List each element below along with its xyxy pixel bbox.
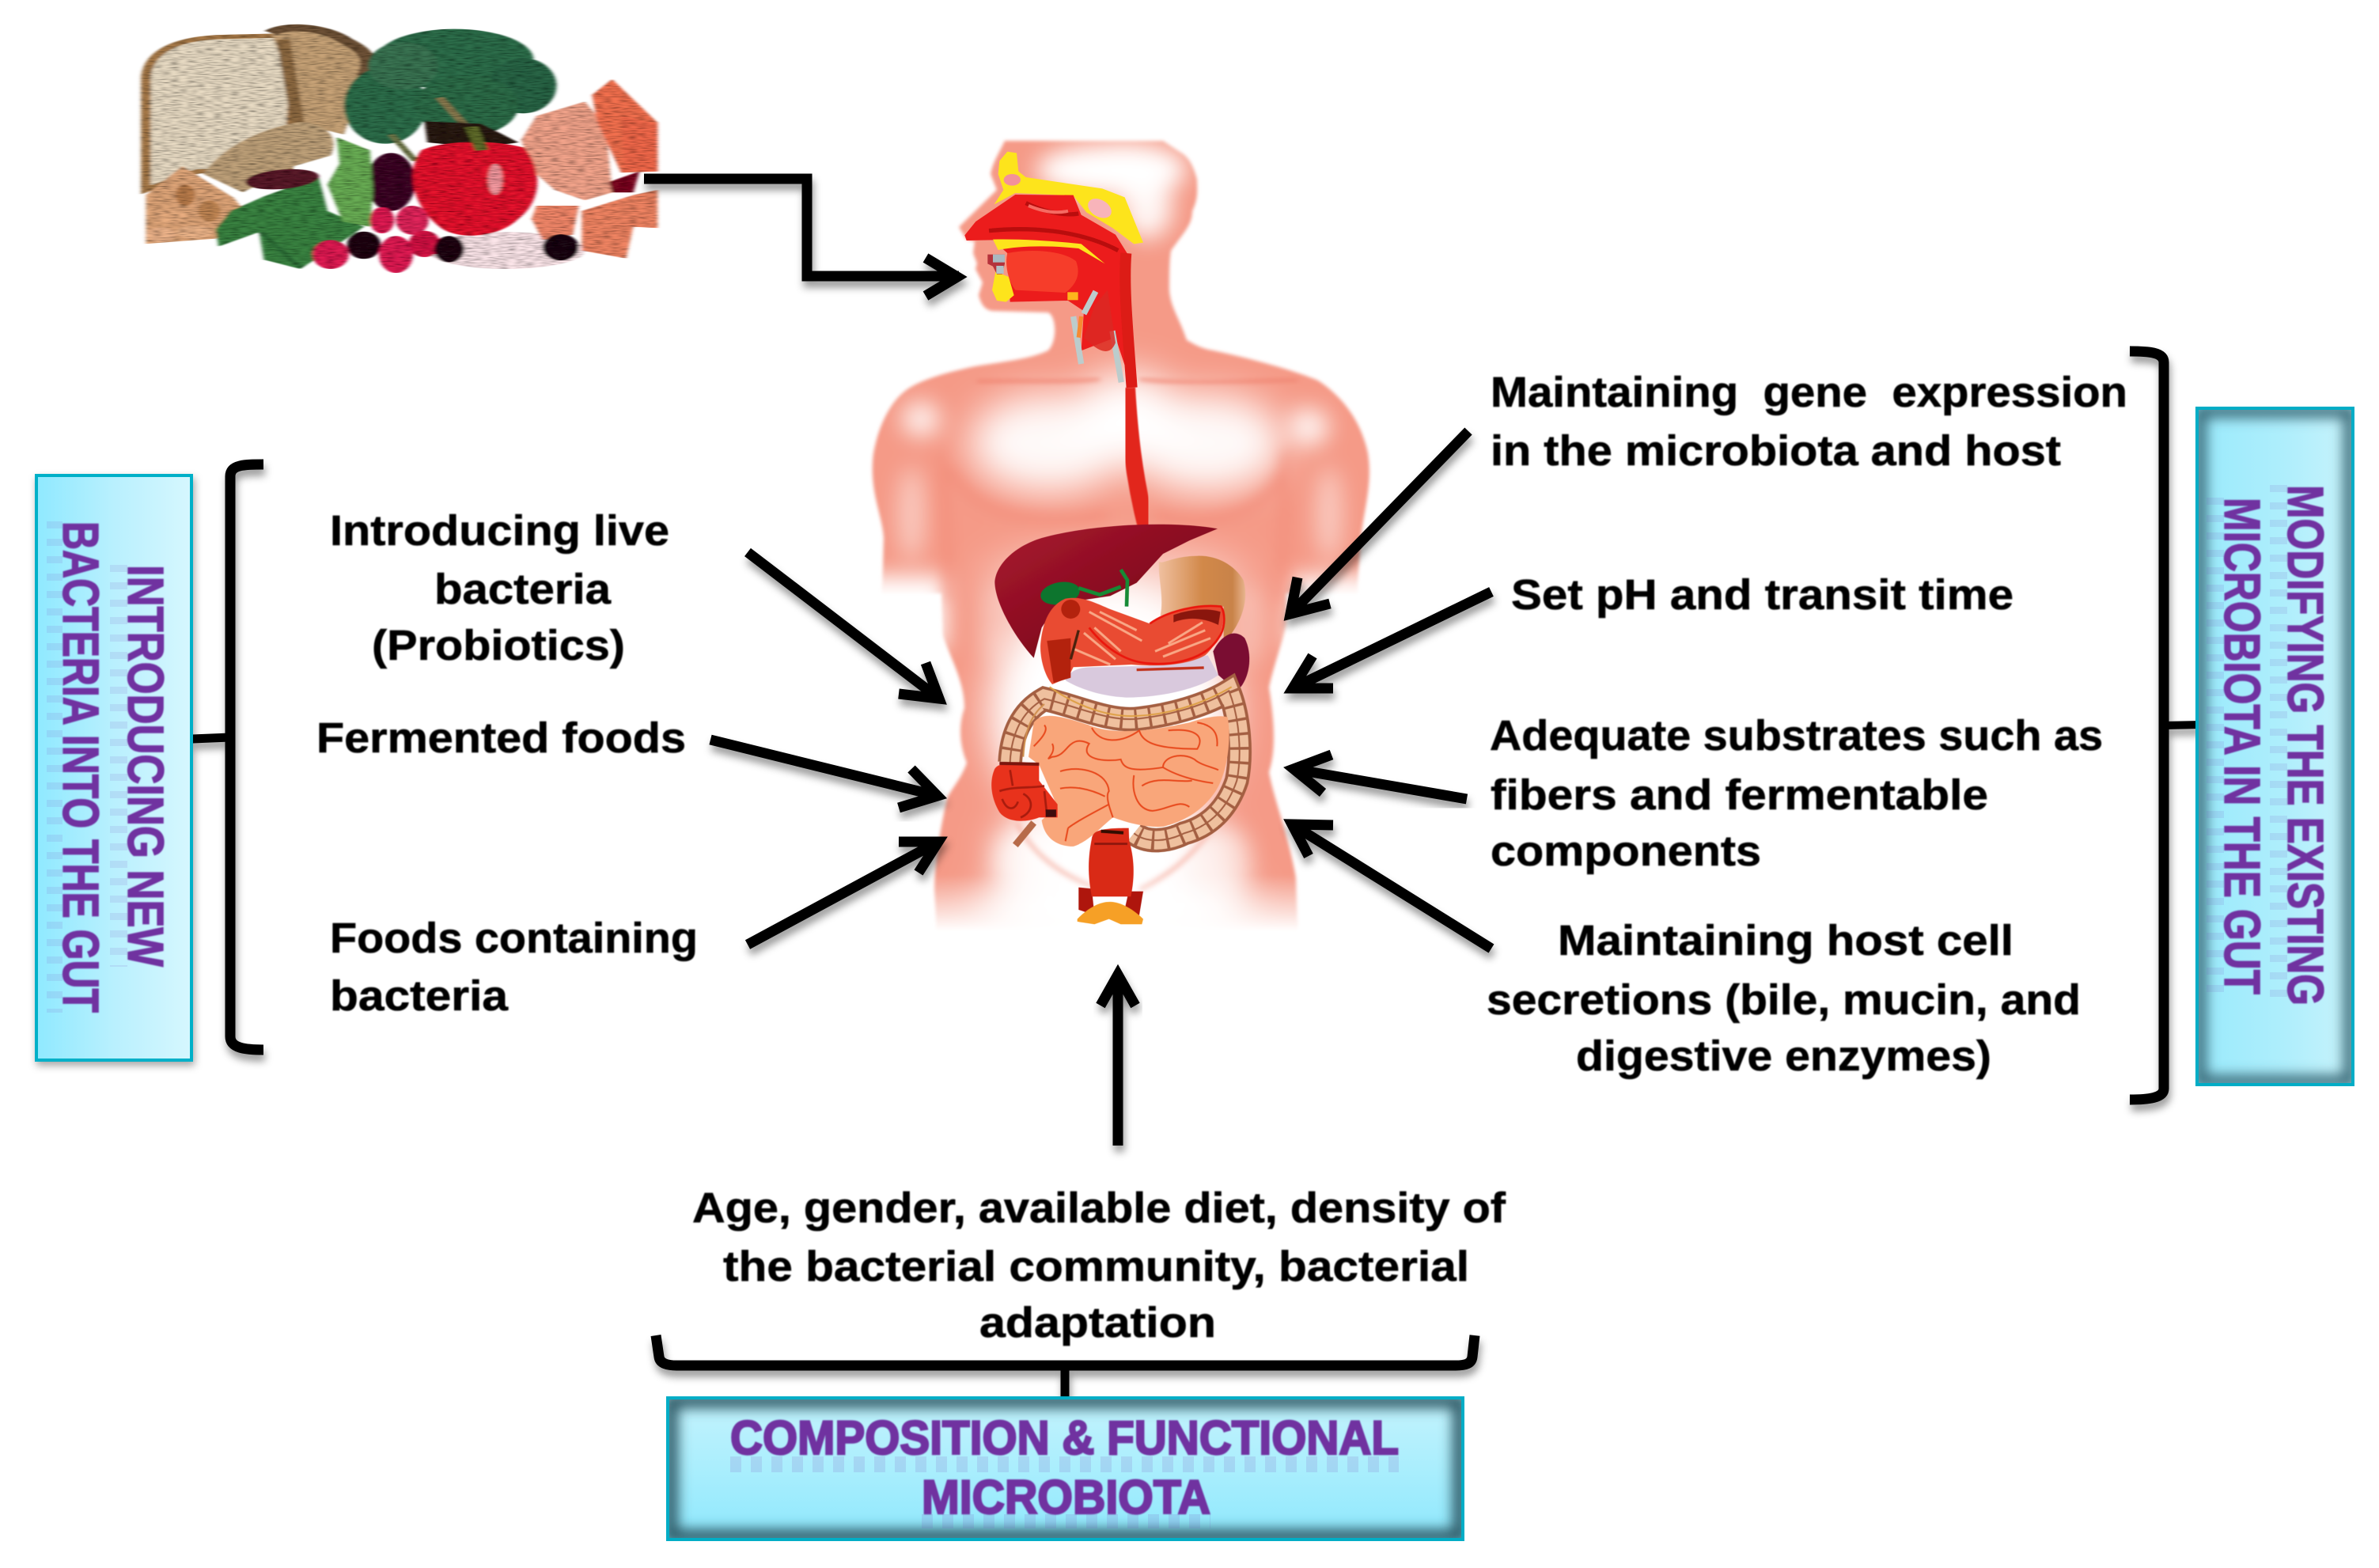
arrow: adequate substrates bbox=[1294, 755, 1467, 799]
text: host cell secretions: Maintaining host cell bbox=[1558, 917, 2013, 964]
text reflections bbox=[730, 1464, 1399, 1521]
rectum bbox=[1078, 828, 1143, 924]
pancreas bbox=[1066, 655, 1218, 698]
dark beet bbox=[241, 166, 324, 193]
bread slices bbox=[146, 28, 368, 190]
chest creases bbox=[941, 451, 1286, 601]
text: gene expression bbox=[1491, 369, 2127, 475]
colon bbox=[1010, 687, 1240, 840]
text: fermented foods: Fermented foods bbox=[316, 714, 686, 762]
arrow: host cell secretions bbox=[1292, 824, 1491, 949]
text reflections bbox=[2215, 485, 2279, 1006]
red pepper bbox=[413, 127, 537, 236]
grain loaf bbox=[203, 122, 334, 192]
duodenum and stomach cut bbox=[1040, 598, 1224, 684]
heading: bottom panel label bbox=[730, 1411, 1399, 1524]
text: foods containing bacteria: bacteria bbox=[330, 972, 509, 1020]
text: introducing live bacteria: bacteria bbox=[434, 566, 612, 613]
broccoli bbox=[344, 29, 556, 161]
arrow: pH and transit time bbox=[1293, 592, 1491, 688]
jaw bbox=[992, 271, 1014, 302]
abdominal organs bbox=[991, 525, 1249, 924]
text: age, gender, diet factors: adaptation bbox=[979, 1299, 1216, 1346]
small intestine bbox=[1029, 716, 1229, 846]
heading: bottom panel label: COMPOSITION & FUNCTIONAL bbox=[730, 1411, 1399, 1464]
tongue bbox=[1006, 251, 1078, 293]
text: adequate substrates: components bbox=[1491, 828, 1761, 875]
text: adequate substrates: Adequate substrates such as bbox=[1490, 712, 2103, 759]
salmon melon pieces bbox=[521, 79, 657, 259]
heading: bottom panel label: MICROBIOTA bbox=[922, 1471, 1210, 1524]
cecum and appendix bbox=[991, 762, 1058, 845]
text: age, gender, diet factors: the bacterial community, bacterial bbox=[723, 1243, 1469, 1290]
text: host cell secretions: digestive enzymes) bbox=[1576, 1032, 1991, 1080]
bracket: bottom group bbox=[656, 1335, 1475, 1402]
stomach outer bbox=[1159, 556, 1245, 645]
trachea cartilage bbox=[1074, 291, 1121, 382]
text: adequate substrates bbox=[1490, 712, 2103, 875]
text: adequate substrates: fibers and fermentable bbox=[1491, 771, 1988, 819]
heading: right panel label: MICROBIOTA IN THE GUT bbox=[2214, 498, 2271, 994]
text: foods containing bacteria: Foods containing bbox=[330, 915, 698, 962]
bracket: left group bbox=[192, 464, 263, 1050]
spleen bbox=[1213, 634, 1249, 687]
text: age, gender, diet factors bbox=[692, 1184, 1506, 1346]
text: introducing live bacteria bbox=[330, 507, 669, 669]
panel: modifying the existing microbiota in the gut bbox=[2197, 408, 2353, 1085]
text: age, gender, diet factors: Age, gender, available diet, density of bbox=[692, 1184, 1506, 1232]
palate bbox=[993, 239, 1105, 263]
text: gene expression: in the microbiota and host bbox=[1491, 427, 2061, 475]
illustration: human body with digestive tract bbox=[870, 138, 1372, 927]
panel: introducing new bacteria into the gut bbox=[36, 475, 191, 1060]
text: introducing live bacteria: (Probiotics) bbox=[372, 622, 625, 669]
spinach leaves bbox=[215, 137, 373, 269]
heading: right panel label: MODIFYING THE EXISTING bbox=[2277, 485, 2334, 1006]
almonds bbox=[146, 166, 249, 244]
gallbladder and bile duct bbox=[1039, 570, 1127, 608]
text: gene expression: Maintaining gene expression bbox=[1491, 369, 2127, 416]
text reflections bbox=[55, 521, 119, 1013]
skin silhouette bbox=[870, 138, 1372, 927]
liver bbox=[994, 525, 1218, 658]
arrow: food to mouth bbox=[644, 179, 959, 296]
text: introducing live bacteria: Introducing live bbox=[330, 507, 669, 555]
text: foods containing bacteria bbox=[330, 915, 698, 1020]
teeth bbox=[987, 255, 1005, 275]
panel: composition and functional microbiota bbox=[668, 1398, 1463, 1540]
heading: right panel label bbox=[2214, 485, 2334, 1006]
text: host cell secretions: secretions (bile, mucin, and bbox=[1487, 976, 2081, 1024]
heading: left panel label: INTRODUCING NEW bbox=[117, 565, 174, 967]
text: pH and transit time: Set pH and transit time bbox=[1511, 571, 2013, 619]
berries bbox=[313, 206, 579, 273]
arrow: gene expression bbox=[1290, 431, 1468, 614]
esophagus upper bbox=[1125, 253, 1132, 388]
pink surface shadow bbox=[427, 232, 585, 269]
dark plum bbox=[367, 153, 415, 211]
heading: left panel label bbox=[52, 521, 174, 1013]
esophagus bbox=[1127, 388, 1147, 530]
arrow: age, diet and community factors bbox=[1100, 975, 1135, 1146]
heading: left panel label: BACTERIA INTO THE GUT bbox=[52, 521, 109, 1013]
arrow: introducing live bacteria bbox=[748, 552, 939, 699]
bracket: right group bbox=[2130, 351, 2202, 1100]
illustration: healthy food group bbox=[146, 28, 657, 273]
nasal cavity bbox=[964, 195, 1134, 377]
arrow: foods containing bacteria bbox=[748, 842, 938, 945]
mouth, nasal cavity and throat bbox=[964, 152, 1143, 388]
text: host cell secretions bbox=[1487, 917, 2081, 1080]
sinus bone bbox=[994, 152, 1143, 244]
arrow: fermented foods bbox=[710, 740, 938, 808]
